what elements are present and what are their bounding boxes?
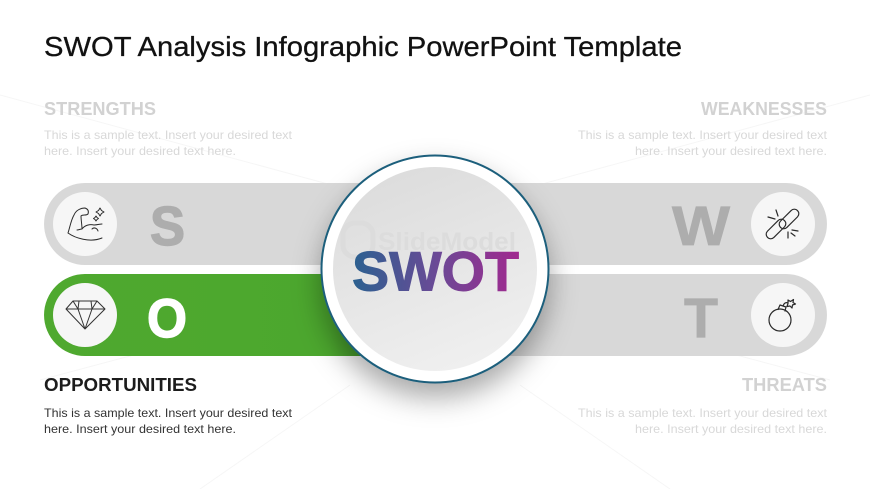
letter W: W	[672, 194, 730, 257]
outer ring	[322, 156, 548, 382]
text block: strengths: This is a sample text. Insert your desired text	[44, 128, 293, 142]
text block: weaknesses: here. Insert your desired text here.	[635, 144, 827, 158]
text block: threats: here. Insert your desired text here.	[635, 422, 827, 436]
watermark	[343, 223, 516, 257]
inner disc	[333, 167, 537, 371]
heading: threats: THREATS	[742, 375, 827, 395]
text block: weaknesses: This is a sample text. Insert your desired text	[578, 128, 828, 142]
bar	[470, 183, 827, 265]
bar	[470, 274, 827, 356]
panel: central SWOT circle	[322, 156, 548, 382]
watermark: SlideModel	[378, 228, 516, 256]
text block: opportunities: here. Insert your desired text here.	[44, 422, 236, 436]
icon: flexed arm	[68, 208, 104, 240]
text block: opportunities: This is a sample text. Insert your desired text	[44, 406, 293, 420]
panel: threats bar	[470, 274, 827, 356]
letter S: S	[150, 195, 185, 257]
panel: strengths text	[44, 99, 293, 158]
icon disc	[53, 283, 117, 347]
text block: strengths: here. Insert your desired text here.	[44, 144, 236, 158]
icon: bomb	[769, 300, 796, 331]
SWOT wordmark: SWOT	[352, 240, 519, 302]
heading: opportunities: OPPORTUNITIES	[44, 375, 197, 395]
icon disc	[751, 283, 815, 347]
bar	[44, 183, 400, 265]
letter O: O	[147, 287, 187, 349]
panel: weaknesses text	[578, 99, 828, 158]
panel: weaknesses bar	[470, 183, 827, 265]
heading: weaknesses: WEAKNESSES	[701, 99, 827, 119]
panel: opportunities text	[44, 375, 293, 436]
bar	[44, 274, 400, 356]
icon: broken chain	[764, 207, 801, 241]
heading: strengths: STRENGTHS	[44, 99, 156, 119]
icon disc	[53, 192, 117, 256]
panel: strengths bar	[44, 183, 400, 265]
icon: diamond	[66, 301, 105, 329]
icon disc	[751, 192, 815, 256]
letter T: T	[684, 286, 718, 349]
title: SWOT Analysis Infographic PowerPoint Template	[44, 31, 682, 62]
panel: opportunities bar	[44, 274, 400, 356]
panel: threats text	[578, 375, 828, 436]
text block: threats: This is a sample text. Insert your desired text	[578, 406, 828, 420]
